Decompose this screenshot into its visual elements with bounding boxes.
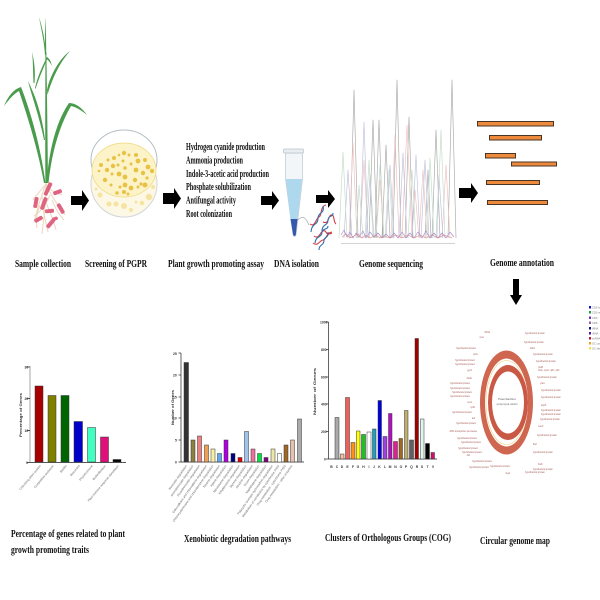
centre label: polymyxa strain [497,402,518,406]
gene labels, right side: hypothetical protein [541,409,562,412]
category letters: I [369,465,370,469]
category labels: Aminobenzoate degradation [170,464,195,497]
category labels: Drug metabolism - cytochrome P450 [256,464,287,506]
axis numbers: 5 [175,438,177,442]
arrow: DNA isolation to sequencing [316,190,335,208]
gene labels, left side: hypothetical protein [462,451,483,454]
gene labels, left side: hypothetical protein [461,441,482,444]
y axis numbers [24,366,28,465]
axes [178,353,304,462]
category labels: Toluene degradation [202,464,221,489]
chart: sequencing chromatogram [339,80,456,244]
axis numbers: 800 [321,348,327,352]
category labels: Xylene degradation [209,464,228,488]
gene labels, left side: hypothetical protein [472,460,493,463]
category labels: Biocontrol [69,464,81,477]
centre label [497,397,518,406]
category letters: C [336,465,339,469]
blue peaks [344,122,443,238]
category letters: H [362,465,365,469]
gene labels, left side: dnaK [467,378,472,380]
category labels: Colonizing plant system [18,464,42,491]
gene labels, left side: hypothetical protein [450,395,471,398]
legend text: rRNA [592,332,599,336]
gene labels, right side: hypothetical protein [537,434,558,437]
gene labels, right side: hypothetical protein [541,389,562,392]
category letters: B [330,465,333,469]
tube cap [284,149,304,153]
chart title: xenobiotic degradation: Xenobiotic degradation pathways [184,533,291,545]
gene labels, right side: hisD [538,464,543,466]
agar surface [92,143,156,197]
axis numbers: 10 [173,416,177,420]
text block: plant growth promoting assays: Root colonization [186,208,232,220]
text block: plant growth promoting assays: Phosphate solubilization [186,181,251,193]
text block: plant growth promoting assays: Hydrogen cyanide production [186,141,265,153]
gene labels, left side [450,331,511,475]
axis numbers: 25 [173,352,177,356]
gene labels, right side: acpP [541,405,547,407]
category letters: O [400,465,403,469]
axis baseline [341,242,455,244]
chart title: percentage of genes: growth promoting traits [11,544,89,556]
plant roots [33,183,65,234]
axis numbers [320,320,328,462]
y axis numbers: 0 [26,461,28,465]
gene labels, right side: hypothetical protein [533,451,554,454]
gene labels, left side: hypothetical protein [450,387,471,390]
gene labels, left side: sigA [506,472,510,475]
label: genome sequencing: Genome sequencing [359,258,423,270]
gene labels, left side: hypothetical protein [456,422,477,425]
category letters: R [416,465,419,469]
category labels: Fluorobenzoate degradation [176,464,201,497]
axis numbers: 20 [173,374,177,378]
category letters: E [346,465,349,469]
category letters: P [405,465,408,469]
icon: rice plant with roots [4,17,87,234]
text block: plant growth promoting assays: Ammonia production [186,154,243,166]
category labels: Benzoate degradation [168,464,188,491]
text block: plant growth promoting assays: Antifungal activity [186,194,236,206]
gene labels, right side: hypothetical protein [541,396,562,399]
text block: plant growth promoting assays [186,141,269,220]
legend swatches [589,306,591,350]
category letters: M [389,465,392,469]
red peaks [349,125,450,238]
gene labels, right side: nusA [538,425,544,428]
chart: circular genome map [450,331,562,475]
category letters: K [378,465,381,469]
category labels: Naphthalene degradation [245,464,268,494]
bacteria rods [33,182,65,229]
axis numbers: 600 [321,376,327,380]
gene labels, left side: tRNA [484,331,490,334]
axis title: Number of Genes [313,368,317,415]
centre label: Paenibacillus [498,397,516,401]
chart title: COG: Clusters of Orthologous Groups (COG) [325,532,451,544]
connecting line [297,217,309,225]
label: DNA isolation: DNA isolation [274,258,319,270]
chart: xenobiotic degradation [168,352,304,523]
icon: DNA isolation tube [284,149,309,236]
chart title: circular genome map: Circular genome map [480,535,550,547]
y axis title: Percentage of Genes [19,393,23,437]
dish base [91,151,157,217]
gene labels, left side: hypothetical protein [450,382,471,385]
arrow: assay to DNA isolation [261,191,279,210]
green peaks [339,130,445,238]
axis title: Number of Genes [171,390,175,425]
axis numbers: 200 [321,430,327,434]
category labels [168,464,294,523]
gene labels, right side: yraA [540,382,545,385]
label: genome annotation: Genome annotation [490,257,554,269]
category labels: Chloroalkane and chloroalkene degradation [171,464,208,514]
category letters: N [394,465,397,469]
category labels: Atrazine degradation [235,464,254,489]
category letters: F [352,465,354,469]
inner genome ring [488,365,528,440]
gene labels, right side: hisG, rpoA, rplC, rplF [538,369,560,372]
gene labels, right side: hypothetical protein [536,360,557,363]
category labels [18,464,120,502]
axis numbers: 15 [173,396,177,400]
gene labels, left side: recA [467,401,472,404]
legend text: CDS [592,321,598,325]
category letters: T [426,465,429,469]
gene labels, left side: hypothetical protein [457,437,478,440]
gene labels, left side: rpsL [480,336,485,339]
gene labels, left side: hypothetical protein [452,391,473,394]
category letters [330,465,435,469]
chart: clusters of orthologous groups [313,320,437,469]
lower colonies [94,185,155,212]
gene labels, right side: hypothetical protein [540,418,561,421]
black peaks [350,80,456,238]
category labels: Polycyclic aromatic hydrocarbon degradation [236,464,274,515]
bars [35,386,121,462]
gene labels, left side: ABC transporter permease [450,430,478,433]
chart title: percentage of genes: Percentage of genes related to plant [11,528,125,540]
outer ring highlight [486,360,527,444]
gene labels, right side: fabG [530,348,535,350]
category labels: Ethylbenzene degradation [218,464,241,495]
chart title: percentage of genes [11,528,125,556]
label: plant growth promoting assay: Plant growth promoting assay [168,258,264,270]
y axis numbers: 30 [24,366,28,370]
y axis numbers: 20 [24,397,28,401]
gene labels, left side: hypothetical protein [458,447,479,450]
gene labels, left side: hypothetical protein [469,466,490,469]
gene labels, right side [524,332,562,474]
category labels: Competitive exclusion [33,464,55,489]
colonies [98,151,154,196]
legend text [592,306,600,350]
category letters: G [357,465,360,469]
category labels: Phytohormone [78,464,94,482]
gene labels, left side: lysR [471,407,475,409]
gene labels, left side: hypothetical protein [455,363,476,366]
category labels: Drug metabolism - other enzymes [264,464,294,503]
gene labels, right side: hypothetical protein [533,353,554,356]
category labels: Biofilm [59,464,68,474]
gene labels, left side: hypothetical protein [490,465,511,468]
gene labels, left side: rpoC [473,353,478,356]
gene labels, right side: hypothetical protein [525,471,546,474]
gene labels, left side: hypothetical protein [452,411,473,414]
axis numbers [173,352,177,464]
legend text: tRNA [592,326,598,330]
tube liquid [286,179,302,220]
legend: circular map features [589,306,600,350]
y axis [27,366,126,462]
DNA pellet [290,219,298,236]
gene labels, right side: hypothetical protein [541,413,562,416]
chart: percentage of genes [18,366,126,502]
y axis numbers: 10 [24,429,28,433]
category labels: Nitrotoluene degradation [212,464,235,493]
axis numbers: 0 [324,458,326,462]
gene labels, left side: gyrA [467,369,472,372]
label: sample collection: Sample collection [15,258,71,270]
category letters: V [432,465,435,469]
dish lid [91,130,157,190]
bars [184,362,302,462]
arrow: sequencing to annotation [459,183,478,203]
category labels: Metabolism of xenobiotics by cytochrome P450 [241,464,281,518]
category letters: D [341,465,344,469]
category labels: Dioxin degradation [243,464,261,487]
outer genome ring [480,351,533,455]
axis numbers: 1000 [320,320,328,324]
icon: petri dish with colonies [91,130,157,217]
gene labels, right side: ftsZ [533,443,537,446]
category letters: S [421,465,424,469]
gene labels, right side: rpoB [538,366,543,369]
arrow: sample to screening [71,190,89,211]
gene labels, left side: hypothetical protein [456,347,477,350]
icon: DNA double helix [310,205,336,250]
base-line signal noise [341,230,454,238]
gene labels, right side: hypothetical protein [524,341,545,344]
gene labels, left side: fliA [467,454,470,457]
bars [335,338,434,459]
category labels: Biofertilization [92,464,107,481]
axis numbers: 0 [175,460,177,464]
gene labels, right side: hypothetical protein [533,468,554,471]
category letters: J [373,465,375,469]
gene labels, right side: hypothetical protein [537,376,558,379]
axes [326,322,437,459]
category labels: Plant immune response stimulation [87,464,120,502]
category labels: Chlorocyclohexane and chlorobenzene degradation [172,464,215,523]
tube body [286,153,302,236]
arrow: annotation to circular map [510,279,522,305]
legend text: CDS [592,316,598,320]
category letters: Q [410,465,413,469]
gene labels, left side: ald [472,418,476,420]
axis numbers: 400 [321,402,327,406]
label: screening of PGPR: Screening of PGPR [85,258,148,270]
arrow: screening to assay [163,188,181,209]
text block: plant growth promoting assays: Indole-3-acetic acid production [186,168,269,180]
category letters: L [384,465,386,469]
gene labels, right side: hypothetical protein [525,332,546,335]
plant leaves [4,17,87,183]
gene labels, left side: hypothetical protein [455,359,476,362]
category labels: Styrene degradation [229,464,248,489]
diagram: genome annotation bars [478,122,556,204]
